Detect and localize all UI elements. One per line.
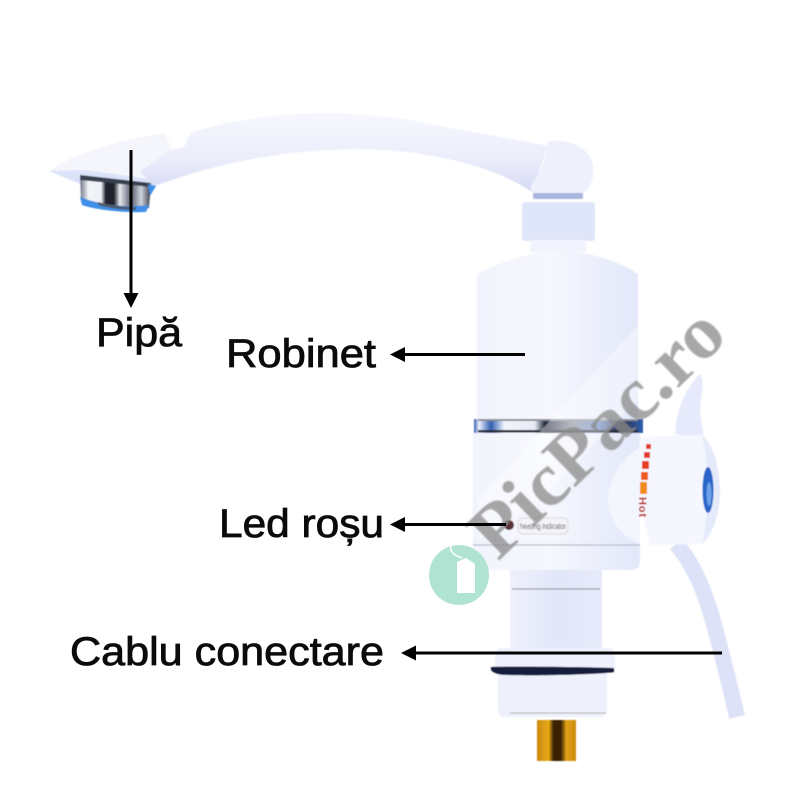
spout pipe	[140, 113, 548, 192]
spout nozzle	[80, 175, 156, 212]
arrow: Pipă	[124, 150, 138, 308]
brass connector	[537, 720, 576, 761]
red led indicator: heating indicator	[520, 522, 566, 531]
faucet product photo	[49, 113, 737, 761]
arrow: Led roșu	[390, 517, 506, 532]
watermark	[429, 291, 741, 605]
threaded collar	[495, 648, 615, 717]
lever handle	[675, 374, 704, 440]
spout elbow	[531, 141, 593, 197]
lower body	[473, 433, 640, 570]
power cable	[676, 544, 737, 717]
temperature scale: Hot	[636, 497, 648, 517]
lower neck	[510, 570, 602, 650]
label: Robinet: Robinet	[226, 332, 376, 376]
label: Led roșu: Led roșu	[219, 502, 384, 546]
diagonal sheen	[477, 325, 638, 540]
watermark logo	[429, 545, 489, 605]
arrow: Robinet	[390, 347, 525, 362]
watermark text: PicPac.ro	[452, 291, 741, 574]
main body	[477, 250, 638, 420]
arrow: Cablu conectare	[401, 646, 722, 660]
swivel nut	[522, 202, 595, 241]
chrome band	[474, 419, 643, 433]
red led indicator	[504, 518, 568, 534]
temperature knob	[608, 435, 720, 545]
rubber o-ring	[491, 667, 614, 675]
spout head	[49, 133, 172, 186]
label: Pipă: Pipă	[96, 311, 183, 355]
label: Cablu conectare: Cablu conectare	[70, 630, 384, 674]
